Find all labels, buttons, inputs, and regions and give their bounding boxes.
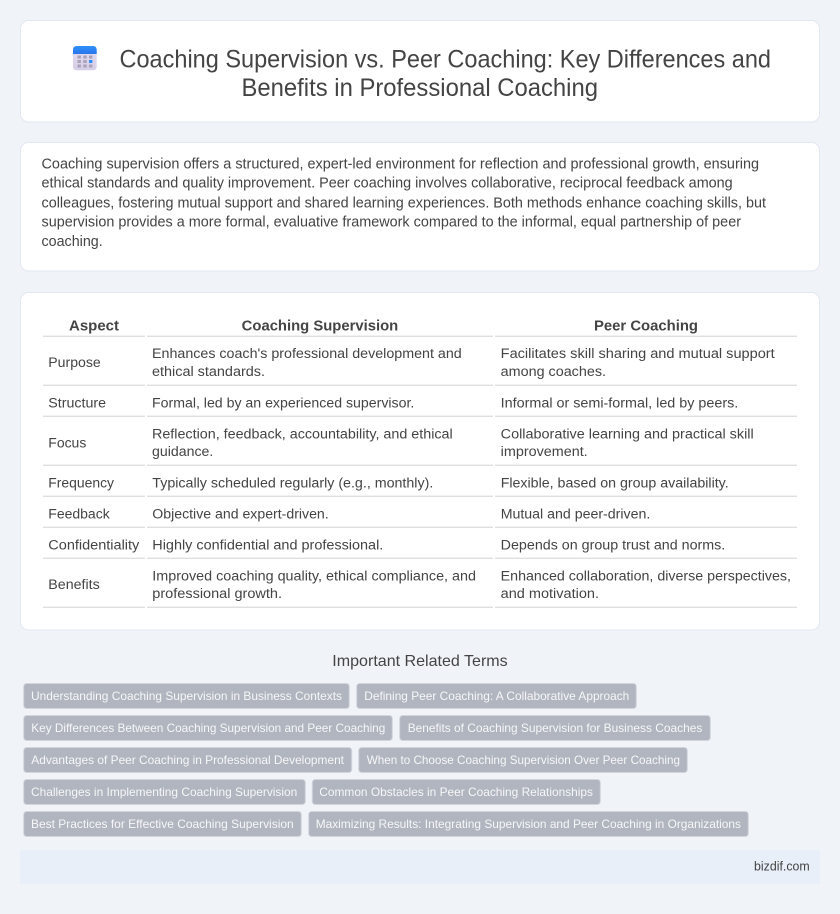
tag: Best Practices for Effective Coaching Supervision <box>31 817 294 831</box>
table header row: Coaching Supervision <box>242 319 398 335</box>
row: focus: Collaborative learning and practical skill <box>501 426 754 442</box>
row: confidentiality: Depends on group trust and norms. <box>501 537 725 553</box>
tag: Common Obstacles in Peer Coaching Relationships <box>319 785 593 799</box>
tag <box>359 748 687 772</box>
tag: Challenges in Implementing Coaching Supervision <box>31 785 297 799</box>
tag <box>400 716 710 740</box>
tag: Defining Peer Coaching: A Collaborative Approach <box>364 689 629 703</box>
intro paragraph: Coaching supervision offers a structured, expert-led environment for reflection and professional growth, ensuring <box>42 156 759 172</box>
row: benefits: Enhanced collaboration, diverse perspectives, <box>501 568 791 584</box>
tag <box>24 748 352 772</box>
row: confidentiality <box>43 537 797 559</box>
tag: Advantages of Peer Coaching in Professional Development <box>31 753 345 767</box>
row: benefits: professional growth. <box>152 586 282 602</box>
row: purpose: Facilitates skill sharing and mutual support <box>501 346 775 362</box>
tag: Benefits of Coaching Supervision for Business Coaches <box>408 721 702 735</box>
row: purpose: among coaches. <box>501 364 606 380</box>
row: purpose <box>43 346 797 386</box>
row: purpose: Enhances coach's professional development and <box>152 346 462 362</box>
tag: Understanding Coaching Supervision in Business Contexts <box>31 689 342 703</box>
title: Coaching Supervision vs. Peer Coaching: Key Differences and <box>120 47 771 74</box>
row: frequency: Typically scheduled regularly (e.g., monthly). <box>152 475 433 491</box>
panel: header <box>20 20 820 122</box>
row: frequency: Flexible, based on group availability. <box>501 475 729 491</box>
row: focus: Focus <box>48 435 86 451</box>
panel: comparison table <box>20 292 820 630</box>
intro paragraph: coaching. <box>42 234 103 250</box>
row: benefits: Benefits <box>48 577 100 593</box>
heading: important related terms: Important Related Terms <box>332 653 508 670</box>
intro paragraph: supervision provides a more formal, evaluative framework compared to the informal, equal partnership of peer <box>42 215 741 231</box>
row: benefits: Improved coaching quality, ethical compliance, and <box>152 568 476 584</box>
row: frequency: Frequency <box>48 475 115 491</box>
tag list: related terms <box>24 684 748 836</box>
row: benefits: and motivation. <box>501 586 599 602</box>
row: confidentiality: Confidentiality <box>48 537 140 553</box>
tag <box>24 684 349 708</box>
row: focus: improvement. <box>501 444 588 460</box>
tag: When to Choose Coaching Supervision Over Peer Coaching <box>367 753 680 767</box>
intro paragraph: ethical standards and quality improvement. Peer coaching involves collaborative, reciprocal feedback among <box>42 176 733 192</box>
intro paragraph <box>42 156 766 250</box>
tag <box>24 780 305 804</box>
tag: Key Differences Between Coaching Supervision and Peer Coaching <box>31 721 385 735</box>
row: structure: Formal, led by an experienced supervisor. <box>152 395 414 411</box>
tag <box>24 716 392 740</box>
panel: introduction <box>20 142 820 271</box>
tag <box>309 812 748 836</box>
tag: Maximizing Results: Integrating Supervision and Peer Coaching in Organizations <box>316 817 741 831</box>
row: structure: Informal or semi-formal, led by peers. <box>501 395 738 411</box>
title: Benefits in Professional Coaching <box>242 75 598 102</box>
intro paragraph: colleagues, fostering mutual support and shared learning experiences. Both methods enhance coaching skills, but <box>42 195 766 211</box>
row: feedback: Objective and expert-driven. <box>152 506 329 522</box>
title <box>120 47 771 102</box>
row: structure: Structure <box>48 395 106 411</box>
footer source text: bizdif.com <box>754 860 810 874</box>
row: purpose: Purpose <box>48 355 101 371</box>
tag <box>312 780 600 804</box>
row: feedback <box>43 506 797 528</box>
row: feedback: Feedback <box>48 506 111 522</box>
row: benefits <box>43 568 797 608</box>
table header row: Aspect <box>69 319 119 335</box>
row: structure <box>43 395 797 417</box>
tag <box>357 684 636 708</box>
table header row <box>43 319 797 337</box>
table header row: Peer Coaching <box>594 319 698 335</box>
row: confidentiality: Highly confidential and professional. <box>152 537 383 553</box>
tag <box>24 812 301 836</box>
icon: calendar <box>73 46 97 70</box>
row: focus: guidance. <box>152 444 213 460</box>
row: feedback: Mutual and peer-driven. <box>501 506 650 522</box>
row: frequency <box>43 475 797 497</box>
footer <box>20 850 820 884</box>
row: purpose: ethical standards. <box>152 364 265 380</box>
row: focus: Reflection, feedback, accountability, and ethical <box>152 426 453 442</box>
row: focus <box>43 426 797 466</box>
